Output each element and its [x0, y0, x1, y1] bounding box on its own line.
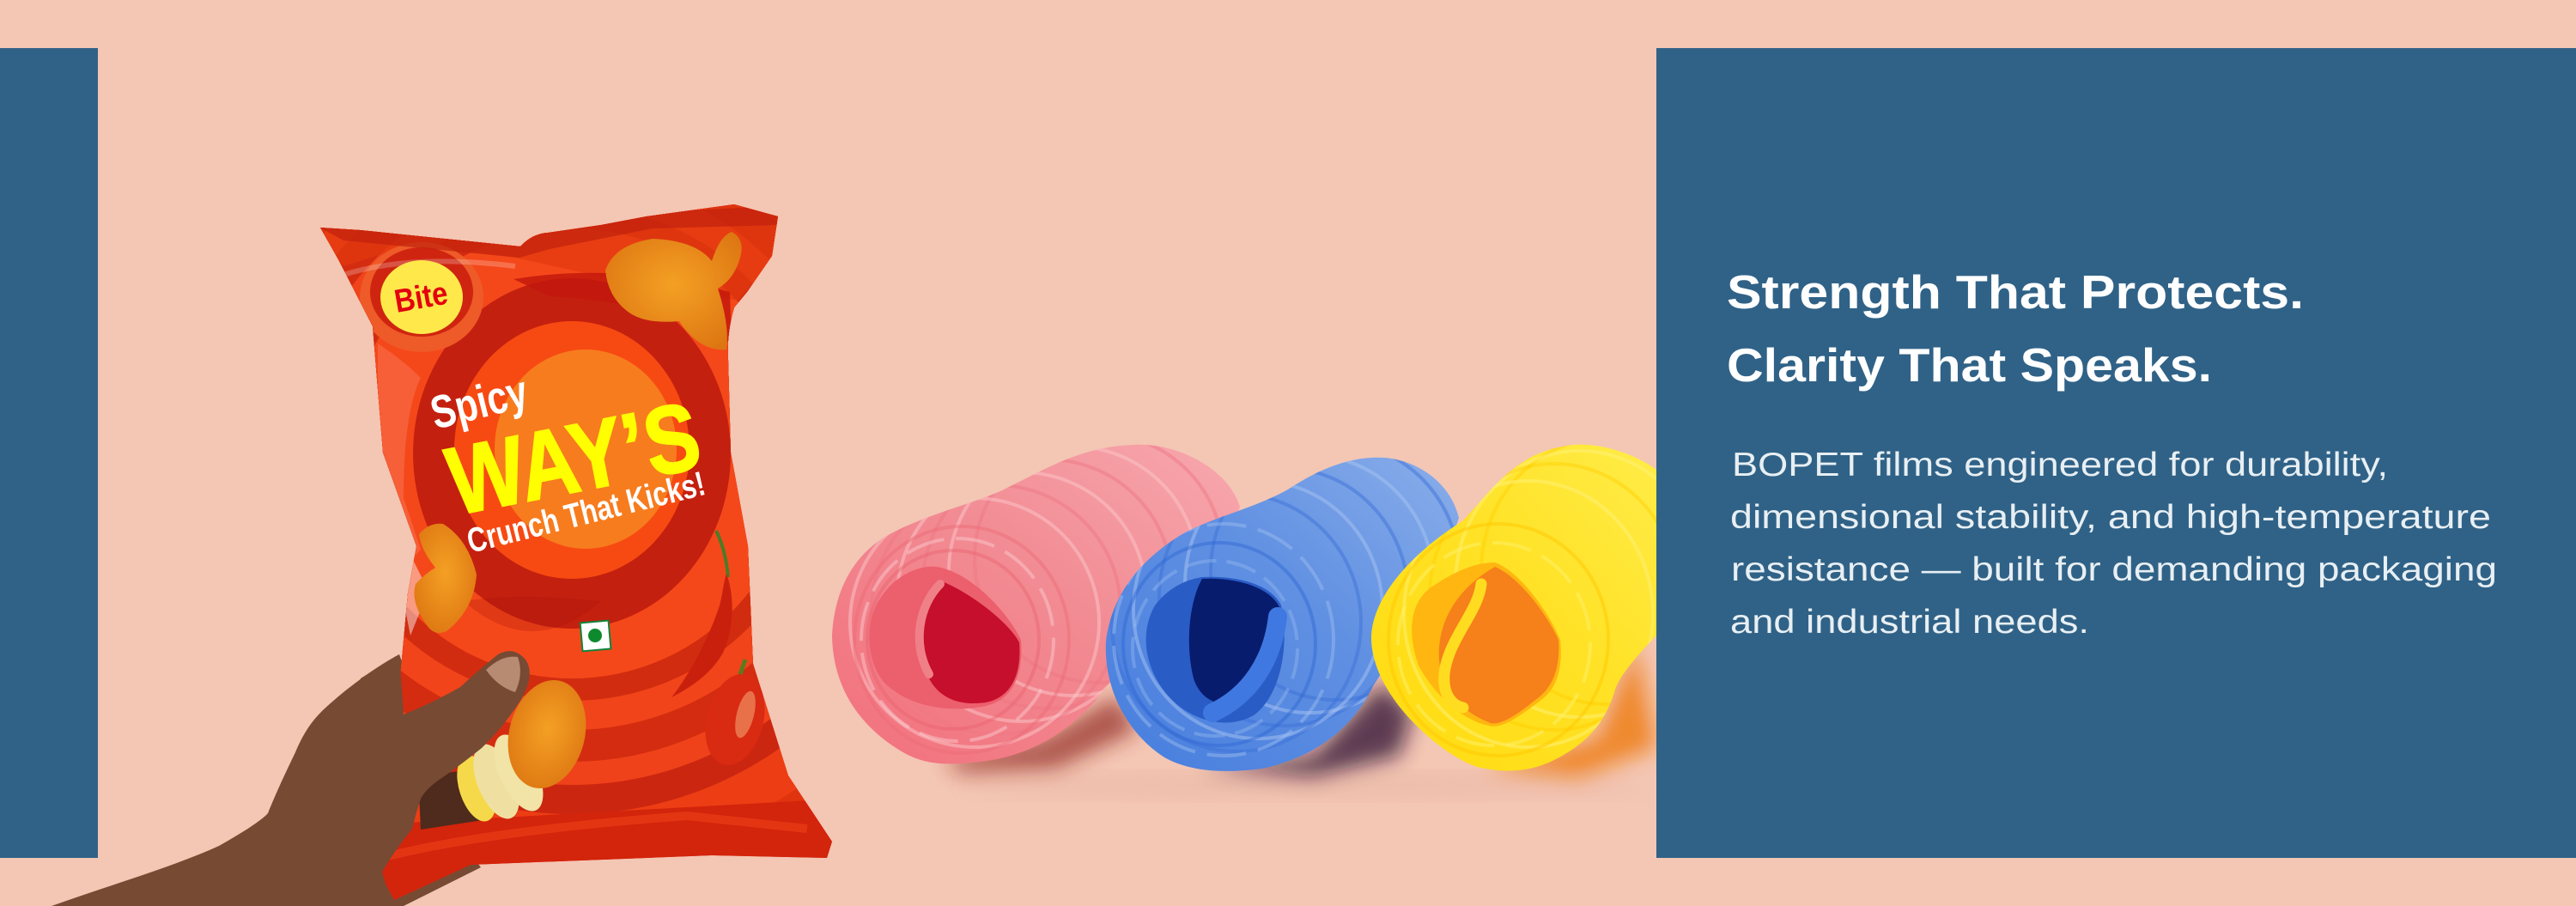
heading: Clarity That Speaks. [1727, 338, 2212, 392]
roll: yellow [1370, 445, 1656, 771]
text block: description: and industrial needs. [1730, 604, 2089, 641]
hand seen through clear window [418, 769, 483, 830]
text block: description [1730, 447, 2497, 641]
icon: top chip [605, 232, 742, 350]
badge: Bite [380, 260, 463, 334]
panel: left blue band [0, 48, 98, 858]
roll: blue [1106, 442, 1460, 771]
text: Spicy: Spicy [425, 366, 533, 440]
icon: vegetarian mark [580, 621, 611, 651]
badge: Bite: Bite [392, 276, 451, 320]
text block: description: BOPET films engineered for durability, [1732, 447, 2388, 483]
text block: description: resistance — built for demanding packaging [1731, 551, 2497, 588]
yellow roll opening [1412, 562, 1561, 727]
hand thumb and wrist [326, 651, 530, 906]
image: rolls of coloured twine [832, 445, 1656, 795]
icon: chili pepper [671, 531, 732, 697]
heading: Strength That Protects. [1727, 265, 2304, 319]
icon: pale chip stack [450, 727, 553, 826]
thumbnail [486, 657, 520, 692]
pink roll opening [869, 567, 1021, 708]
image: hand holding snack bag [52, 204, 832, 906]
icon: left chip [414, 524, 477, 633]
icon: tomato [696, 660, 774, 771]
blue roll opening [1146, 577, 1285, 722]
icon: bottom chip [497, 672, 597, 797]
snack bag [320, 204, 832, 900]
roll shadows [945, 644, 1657, 794]
text: WAY'S logo: WAY’S [439, 381, 708, 536]
roll: pink [832, 434, 1240, 763]
text: Crunch That Kicks!: Crunch That Kicks! [464, 465, 709, 561]
text block: description: dimensional stability, and high-temperature [1730, 499, 2491, 536]
panel: right blue text panel [1656, 48, 2576, 858]
heading [1727, 265, 2304, 392]
hand palm behind bag [52, 654, 481, 906]
